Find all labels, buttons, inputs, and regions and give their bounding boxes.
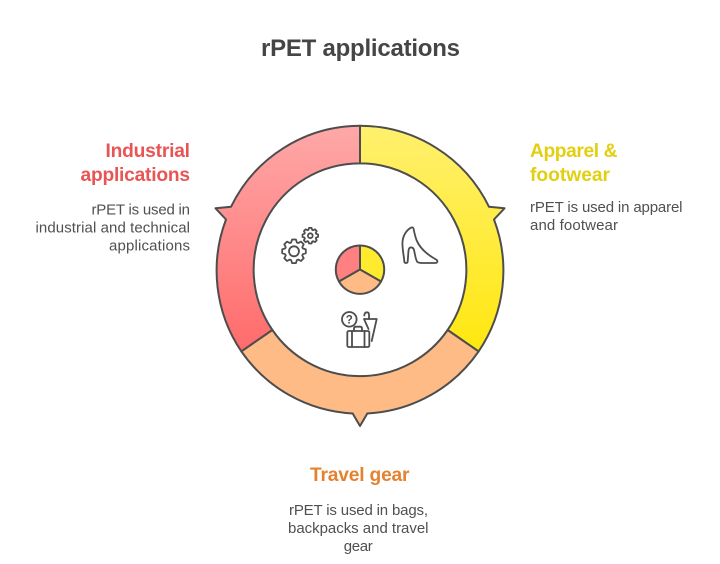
heading: travel gear: Travel gear [310, 465, 410, 486]
pie slice: red [336, 245, 360, 282]
label: travel gear [288, 465, 428, 555]
body text: travel gear: gear [344, 538, 373, 555]
icon: travel gear [342, 312, 377, 347]
body text: industrial applications: applications [109, 238, 190, 254]
body text: industrial applications [36, 202, 190, 254]
heading: industrial applications: Industrial [106, 141, 190, 162]
heading: industrial applications [80, 141, 190, 186]
label: industrial applications [36, 141, 190, 254]
icon: high heel shoe [402, 227, 437, 263]
ring segment: apparel and footwear [360, 126, 504, 351]
body text: apparel and footwear: and footwear [530, 217, 618, 234]
icon: gears [282, 228, 318, 263]
heading: apparel and footwear [530, 141, 618, 186]
pie slice: orange [339, 270, 381, 294]
label: apparel and footwear [530, 141, 682, 234]
center pie chart [336, 245, 384, 294]
body text: apparel and footwear: rPET is used in apparel [530, 199, 682, 216]
body text: industrial applications: rPET is used in [92, 202, 190, 218]
body text: travel gear: backpacks and travel [288, 520, 428, 537]
ring segment: industrial applications [216, 126, 360, 351]
body text: industrial applications: industrial and technical [36, 220, 190, 236]
title: rPET applications [261, 35, 460, 62]
donut chart ring [216, 126, 504, 426]
body text: travel gear: rPET is used in bags, [289, 502, 428, 519]
heading: apparel and footwear: Apparel & [530, 141, 618, 162]
body text: apparel and footwear [530, 199, 682, 234]
pie slice: yellow [360, 245, 384, 282]
icon: travel gear: ? [346, 314, 353, 326]
body text: travel gear [288, 502, 428, 555]
heading: apparel and footwear: footwear [530, 165, 611, 186]
ring segment: travel gear [241, 330, 479, 426]
heading: industrial applications: applications [80, 165, 190, 186]
